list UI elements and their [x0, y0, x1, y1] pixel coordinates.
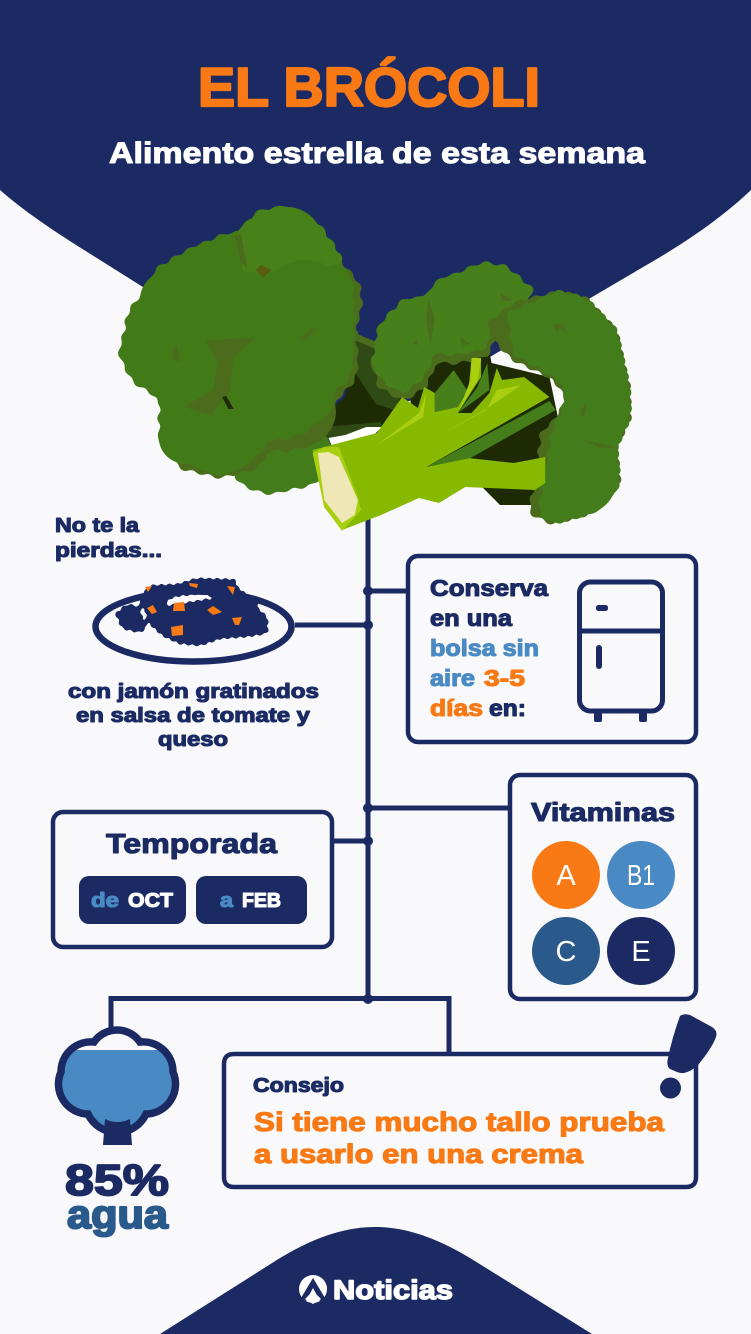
right head shadow	[493, 294, 627, 521]
text: plate caption: en salsa de tomate y	[76, 705, 311, 727]
white gap behind stem	[328, 427, 382, 445]
middle floret	[376, 265, 533, 390]
main left lobe over top floret	[263, 260, 347, 340]
text: conservation: aire	[430, 665, 475, 691]
text: conservation: Conserva	[430, 575, 548, 601]
logo: Antena 3 Noticias: Noticias	[333, 1275, 453, 1305]
panel: season	[53, 812, 332, 947]
pill: to February: FEB	[242, 890, 281, 912]
illustration: broccoli	[122, 207, 627, 531]
background: top navy banner	[0, 0, 751, 417]
text: conservation: días	[430, 695, 483, 721]
panel: tip	[224, 1014, 716, 1187]
panel: vitamins	[510, 775, 696, 999]
left head main	[122, 209, 352, 474]
panel: conservation	[408, 556, 696, 742]
text: tip label: Consejo	[253, 1075, 344, 1097]
pill: from October	[79, 876, 186, 924]
heading: season: Temporada	[106, 828, 277, 859]
text: plate caption: queso	[158, 729, 228, 751]
heading: vitamins: Vitaminas	[531, 797, 675, 827]
stem under band	[426, 401, 556, 467]
left head shadow	[168, 262, 359, 475]
icon: fridge	[579, 582, 663, 722]
icon: broccoli water level	[58, 1030, 176, 1145]
stem highlights	[377, 393, 426, 445]
icon: exclamation mark	[660, 1014, 716, 1098]
vitamin B1	[607, 841, 675, 909]
right head main	[513, 294, 627, 521]
stat: 85% water: agua	[67, 1193, 169, 1237]
text: no te la pierdas	[55, 515, 162, 562]
logo: Antena 3 Noticias	[299, 1275, 453, 1305]
left top floret	[237, 207, 338, 273]
text: plate caption: con jamón gratinados	[68, 681, 319, 703]
pill: to February	[196, 876, 307, 924]
vitamin E	[607, 917, 675, 985]
left head creases	[184, 338, 255, 415]
stat: 85% water: 85%	[65, 1156, 169, 1205]
stem branch fill	[435, 363, 489, 413]
text: no te la pierdas: No te la	[55, 515, 140, 537]
connector lines	[111, 515, 510, 1054]
stat: 85% water	[65, 1156, 169, 1237]
vitamin A: A	[556, 860, 576, 892]
vitamin A	[532, 841, 600, 909]
text: conservation	[430, 575, 548, 721]
text: tip	[254, 1107, 665, 1169]
background: bottom navy hump	[160, 1227, 592, 1334]
behind-stem shadows	[303, 345, 411, 458]
middle floret shadow	[376, 305, 492, 398]
text: conservation: 3-5	[484, 665, 525, 691]
text: conservation: en:	[489, 695, 526, 721]
icon: plate with food	[96, 580, 292, 662]
text: conservation: bolsa sin	[430, 635, 539, 661]
pill: to February: a	[220, 890, 234, 912]
text: conservation: en una	[430, 605, 512, 631]
text: no te la pierdas: pierdas...	[55, 540, 162, 562]
pill: from October: OCT	[128, 890, 173, 912]
title: EL BRÓCOLI	[198, 56, 540, 118]
text: tip: Si tiene mucho tallo prueba	[254, 1107, 665, 1137]
text: plate caption	[68, 681, 319, 751]
vitamin C: C	[556, 936, 576, 968]
vitamin E: E	[631, 936, 651, 968]
subtitle: Alimento estrella de esta semana	[109, 137, 645, 170]
stem cut end	[313, 447, 361, 531]
vitamin C	[532, 917, 600, 985]
vitamin B1: B1	[627, 860, 655, 892]
text: tip: a usarlo en una crema	[254, 1139, 584, 1169]
lower left floret	[238, 430, 329, 491]
pill: from October: de	[91, 890, 119, 912]
